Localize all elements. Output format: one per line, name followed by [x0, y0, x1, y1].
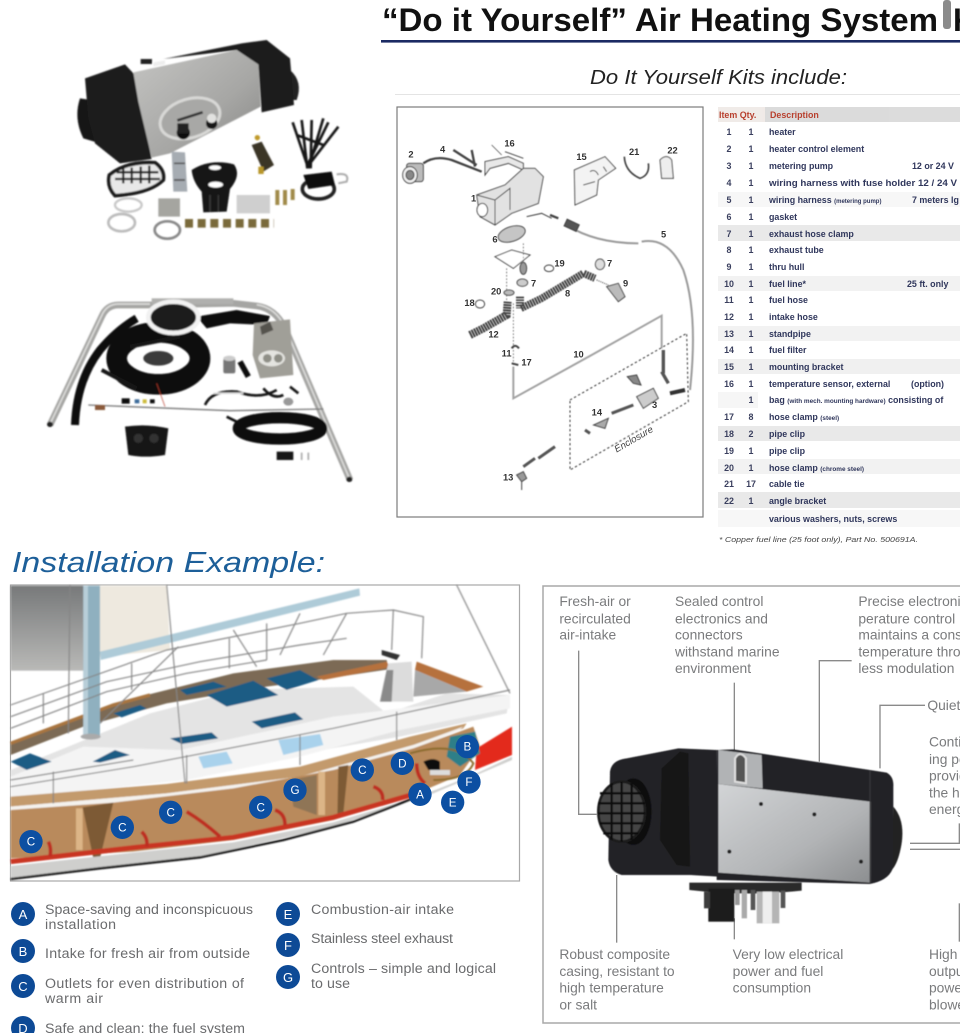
marker: A: [408, 783, 432, 806]
part numbers: 6: [492, 235, 498, 245]
part numbers: Enclosure: [613, 424, 656, 455]
part 22 angle bracket: [660, 157, 673, 178]
legend item G: [276, 961, 496, 992]
roof hatches: [11, 670, 318, 770]
black gasket plate: [192, 162, 237, 212]
table: parts list: 1: [749, 395, 754, 405]
table: parts list: 1: [749, 279, 754, 289]
legend item C: [11, 974, 244, 1007]
table: parts list: 7 meters lg: [912, 195, 959, 205]
legend item A: A: [19, 907, 28, 922]
callout: sealed electronics: Sealed control: [675, 593, 763, 609]
legend item B: B: [19, 944, 27, 959]
table row shading: [718, 107, 960, 527]
panel: heater features: [543, 586, 960, 1023]
table: parts list: 2: [727, 144, 732, 154]
callout: low consumption: consumption: [733, 980, 811, 996]
table: parts list: 17: [746, 479, 756, 489]
legend item B: Intake for fresh air from outside: [45, 946, 250, 962]
marker: C: [111, 816, 134, 839]
callout: low consumption: power and fuel: [733, 963, 823, 979]
bulkheads: [76, 772, 325, 850]
table: parts list: 8: [749, 412, 754, 422]
photo: heater kit with parts: [77, 40, 347, 239]
hull side top wood strip: [11, 723, 467, 807]
part numbers: 12: [488, 330, 499, 340]
far side deck: [11, 660, 388, 755]
part 6 gasket: [496, 223, 527, 245]
legend item C: C: [18, 979, 28, 994]
part 2 control element: [403, 163, 423, 183]
callout: casing: high temperature: [559, 980, 664, 996]
marker: G: G: [290, 784, 300, 797]
table: parts list: 1: [749, 161, 754, 171]
table: parts list: 1: [749, 295, 754, 305]
clips 18 19 20: [475, 300, 485, 308]
callout: air-intake: recirculated: [559, 610, 631, 626]
table: parts list: 1: [749, 312, 754, 322]
gasket grille: [109, 162, 164, 196]
table: parts list: 6: [727, 212, 732, 222]
part 7 clamps: [517, 279, 528, 286]
marker: C: [19, 830, 43, 853]
table: parts list: 1: [749, 496, 754, 506]
part numbers: 3: [652, 400, 657, 410]
callout: air-intake: air-intake: [559, 627, 617, 643]
enclosure: [570, 333, 688, 470]
connectors: [122, 398, 130, 404]
callout: quiet: Quiet: [927, 697, 960, 713]
panel rivets: [759, 802, 763, 806]
table: parts list: 16: [724, 379, 734, 389]
leader lines: [579, 651, 960, 943]
boom: [100, 588, 360, 660]
marker: F: F: [465, 776, 473, 789]
callout: casing: or salt: [559, 997, 597, 1013]
table: parts list: gasket: [769, 212, 797, 222]
part numbers: 13: [503, 472, 513, 482]
table: parts list: angle bracket: [769, 496, 826, 506]
mounting flange: [689, 883, 802, 894]
part numbers: 21: [629, 147, 639, 157]
table: parts list: heater control element: [769, 144, 864, 154]
callout: high output: High: [929, 946, 957, 962]
table: parts list: exhaust tube: [769, 245, 824, 255]
part numbers: 19: [554, 259, 565, 269]
legend item F: F: [284, 938, 292, 953]
table: parts list: cable tie: [769, 479, 805, 489]
legend item A: [11, 902, 253, 933]
table: parts list: thru hull: [769, 262, 804, 272]
part 12 intake hose: [470, 302, 508, 335]
table: parts list: bag (with mech. mounting hardware) consisting of: [769, 395, 943, 405]
part numbers: 20: [491, 287, 501, 297]
black silencer: [197, 310, 270, 328]
heater illustration: [598, 748, 902, 923]
legend item A: Space-saving and inconspicuous: [45, 902, 253, 918]
mount plate: [495, 250, 530, 268]
table: parts list: 1: [749, 212, 754, 222]
cable ties: [293, 118, 338, 168]
table: parts list: 8: [727, 245, 732, 255]
part numbers: 7: [607, 259, 612, 269]
callout: sealed electronics: environment: [675, 660, 751, 676]
callout: casing: Robust composite: [559, 946, 670, 962]
callout: temperature control: perature control: [858, 610, 955, 626]
marker: C: C: [27, 836, 35, 849]
deck and cabin top: [11, 687, 510, 793]
panel: exploded parts diagram: [397, 107, 703, 517]
table: parts list: 1: [749, 463, 754, 473]
red hull wedge: [475, 727, 512, 770]
part 16 sensor: [485, 152, 523, 175]
part 8 exhaust hose: [521, 273, 595, 308]
table: parts list: 4: [727, 178, 732, 188]
part numbers: 9: [623, 279, 628, 289]
part numbers: 7: [531, 279, 536, 289]
table: parts list: hose clamp (chrome steel): [769, 463, 864, 473]
clamp: [302, 179, 334, 199]
table: parts list: 22: [724, 496, 734, 506]
air intake grille: [615, 778, 652, 845]
marker: C: C: [166, 806, 175, 819]
part 4 harness: [423, 150, 482, 172]
table: parts list: temperature sensor, external: [769, 379, 890, 389]
legend item E: Combustion-air intake: [311, 902, 454, 918]
callout: air-intake: Fresh-air or: [559, 593, 631, 609]
table: parts list: 21: [724, 479, 734, 489]
part numbers: 10: [573, 350, 584, 360]
table: parts list: fuel hose: [769, 295, 808, 305]
marker: B: B: [463, 741, 471, 754]
marker: D: D: [398, 757, 407, 770]
part numbers: 22: [667, 145, 678, 155]
subtitle: kits include: Do It Yourself Kits include:: [590, 66, 847, 89]
table: parts list: * Copper fuel line (25 foot only), Part No. 500691A.: [719, 535, 918, 544]
helm pedestal: [380, 662, 413, 702]
part numbers: 4: [440, 145, 446, 155]
rigging and railings: [11, 585, 510, 803]
legend item C: Outlets for even distribution of: [45, 976, 244, 992]
part 21 cable tie: [624, 157, 649, 178]
marker: E: [441, 791, 464, 814]
table: parts list: 25 ft. only: [907, 279, 948, 289]
part numbers: 8: [565, 289, 570, 299]
table: parts list: metering pump: [769, 161, 834, 171]
part numbers: 11: [502, 349, 512, 359]
wiring harness for pump: [238, 418, 322, 439]
panel: boat installation diagram: [10, 585, 520, 881]
table: parts list: 1: [749, 379, 754, 389]
table: parts list: wiring harness (metering pump): [768, 195, 881, 205]
table: parts list: heater: [769, 127, 796, 137]
marker: F: [457, 770, 481, 794]
table: parts list: 1: [749, 195, 754, 205]
callout texts: [559, 593, 960, 1013]
callout: sealed electronics: withstand marine: [674, 644, 780, 660]
table: parts list: 15: [724, 362, 734, 372]
table: parts list: 1: [749, 262, 754, 272]
legend item G: to use: [311, 976, 350, 992]
table: parts list: mounting bracket: [769, 362, 844, 372]
pump 3 and fuel filter 14: [662, 350, 668, 383]
table: parts list: 10: [724, 279, 734, 289]
table: parts list: wiring harness with fuse holder 12 / 24 V: [768, 178, 957, 188]
table: parts list: 12: [724, 312, 734, 322]
part 5 harness: [527, 213, 552, 218]
exhaust tube: [50, 303, 350, 480]
table: parts list: 1: [749, 178, 754, 188]
callout markers: [19, 735, 481, 853]
legend item G: G: [283, 970, 293, 985]
sensor: [252, 142, 274, 172]
marker: G: [283, 778, 307, 802]
table: parts list: 1: [749, 362, 754, 372]
legend item E: E: [284, 907, 293, 922]
table: parts list: 2: [749, 429, 754, 439]
table: parts list: Item Qty.: [719, 110, 756, 120]
table: parts list: 1: [749, 127, 754, 137]
photo: exhaust, harness and fuel kit: [47, 298, 352, 482]
table: parts list: 19: [724, 446, 734, 456]
heater body: [77, 40, 299, 163]
marker: C: [249, 796, 272, 819]
small cable: [205, 387, 298, 405]
table: parts list: [718, 107, 960, 544]
legend item C: warm air: [44, 991, 103, 1007]
table: parts list: standpipe: [769, 329, 811, 339]
part 13 standpipe: [517, 472, 527, 490]
table: parts list: 1: [749, 144, 754, 154]
part numbers: 1: [471, 194, 476, 204]
table: parts list: 5: [727, 195, 732, 205]
table: parts list: 12 or 24 V: [912, 161, 954, 171]
part 9 thru hull: [607, 283, 625, 302]
control panel: [125, 425, 168, 457]
table: parts list: 1: [749, 345, 754, 355]
part numbers: 17: [521, 357, 532, 367]
marker: B: [456, 735, 479, 758]
table: parts list: 20: [724, 463, 734, 473]
table: parts list: 1: [749, 229, 754, 239]
table: parts list: fuel line*: [769, 279, 807, 289]
table: parts list: intake hose: [769, 312, 818, 322]
callout: temperature control: less modulation: [858, 660, 954, 676]
marker: C: [351, 758, 374, 782]
table: parts list: (option): [911, 379, 944, 389]
legend item F: [276, 931, 453, 957]
marker: C: [159, 801, 182, 824]
thru hull parts: [223, 358, 235, 373]
marker: C: C: [118, 821, 127, 834]
hose clamps: [115, 198, 142, 212]
table: parts list: 14: [724, 345, 734, 355]
table: parts list: hose clamp (steel): [769, 412, 839, 422]
part numbers: 16: [504, 139, 515, 149]
heater installation: [447, 732, 480, 767]
table: parts list: 18: [724, 429, 734, 439]
table: parts list: 1: [727, 127, 732, 137]
marker: C: C: [358, 764, 367, 777]
table: parts list: 11: [724, 295, 734, 305]
legend item D: [11, 1016, 245, 1033]
wiring harness: [117, 332, 200, 384]
table: parts list: fuel filter: [769, 345, 807, 355]
part 11 17: [512, 346, 519, 365]
heading: installation example: Installation Example:: [12, 547, 325, 579]
legend item E: [276, 902, 454, 926]
table: parts list: 17: [724, 412, 734, 422]
lower hull: [11, 757, 512, 878]
table: parts list: pipe clip: [769, 446, 806, 456]
marker: D: [391, 752, 414, 775]
washers and nuts: [237, 195, 270, 213]
marker: E: E: [449, 796, 457, 809]
marker: A: A: [416, 788, 424, 801]
legend: installation features: [11, 902, 496, 1033]
table: parts list: 1: [749, 446, 754, 456]
red heating duct: [11, 793, 417, 862]
part numbers: 18: [464, 298, 475, 308]
white coiled line: [148, 302, 198, 333]
mounting bracket: [253, 319, 293, 378]
callout: sealed electronics: connectors: [675, 627, 743, 643]
callout: casing: casing, resistant to: [559, 963, 675, 979]
table: parts list: various washers, nuts, screws: [769, 514, 897, 524]
sail: [11, 586, 84, 671]
legend item F: Stainless steel exhaust: [311, 931, 453, 947]
table: parts list: exhaust hose clamp: [769, 229, 854, 239]
table: parts list: 9: [727, 262, 732, 272]
table: parts list: pipe clip: [769, 429, 806, 439]
standpipe: [88, 405, 323, 411]
mast: [83, 586, 100, 736]
legend item B: [11, 939, 250, 963]
table: parts list: 13: [724, 329, 734, 339]
part 10 fuel line: [513, 316, 662, 398]
title: “Do it Yourself” Air Heating System: [382, 2, 938, 38]
table: parts list: Description: [770, 110, 819, 120]
part 15 bracket: [574, 157, 616, 205]
metal bracket: [172, 152, 187, 192]
callout: sealed electronics: electronics and: [675, 610, 768, 626]
table: parts list: 3: [727, 161, 732, 171]
legend item G: Controls – simple and logical: [311, 961, 496, 977]
part numbers: 2: [408, 149, 414, 159]
table: parts list: 7: [727, 229, 732, 239]
table: parts list: 1: [749, 245, 754, 255]
part 1 heater: [477, 168, 543, 225]
callout: low consumption: Very low electrical: [733, 946, 843, 962]
marker: C: C: [256, 801, 265, 814]
part numbers: 15: [576, 152, 587, 162]
part numbers: 14: [592, 407, 603, 417]
table: parts list: 1: [749, 329, 754, 339]
part numbers: 5: [661, 229, 666, 239]
part numbers: [408, 139, 678, 482]
intake hose: [75, 318, 137, 425]
legend item A: installation: [45, 917, 116, 933]
cabin interior: [11, 727, 480, 858]
